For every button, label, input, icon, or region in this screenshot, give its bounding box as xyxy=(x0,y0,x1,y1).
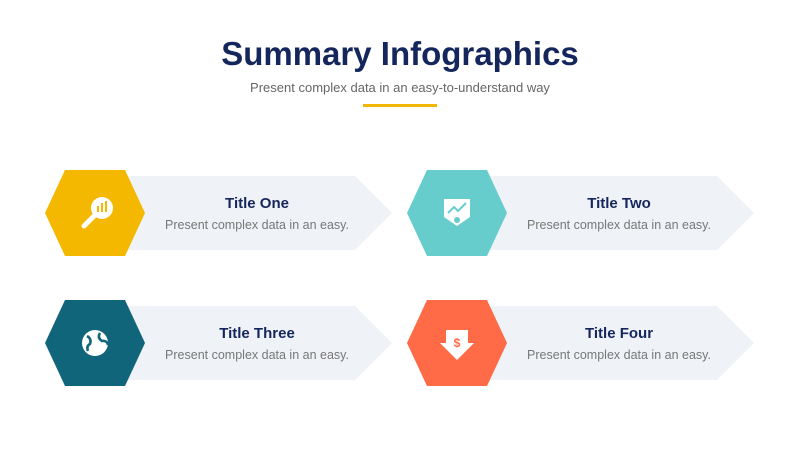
card: four: Title Four xyxy=(585,325,653,342)
card: two xyxy=(407,170,754,256)
card: one xyxy=(45,170,392,256)
icon: magnifier chart xyxy=(84,197,113,226)
icon: dollar down arrow xyxy=(440,330,474,360)
card: three xyxy=(45,300,392,386)
icon: presentation eye xyxy=(444,199,470,226)
title: Summary Infographics xyxy=(221,35,579,72)
card: one: Present complex data in an easy. xyxy=(165,218,349,232)
card: one: Title One xyxy=(225,195,289,212)
card: two: Present complex data in an easy. xyxy=(527,218,711,232)
icon: globe xyxy=(82,330,108,356)
accent underline xyxy=(363,104,437,107)
subtitle: Present complex data in an easy-to-understand way xyxy=(250,80,550,95)
card: four xyxy=(407,300,754,386)
card: three: Present complex data in an easy. xyxy=(165,348,349,362)
icon: dollar down arrow: $ xyxy=(454,336,461,350)
card: three: Title Three xyxy=(219,325,295,342)
card: two: Title Two xyxy=(587,195,651,212)
card: four: Present complex data in an easy. xyxy=(527,348,711,362)
